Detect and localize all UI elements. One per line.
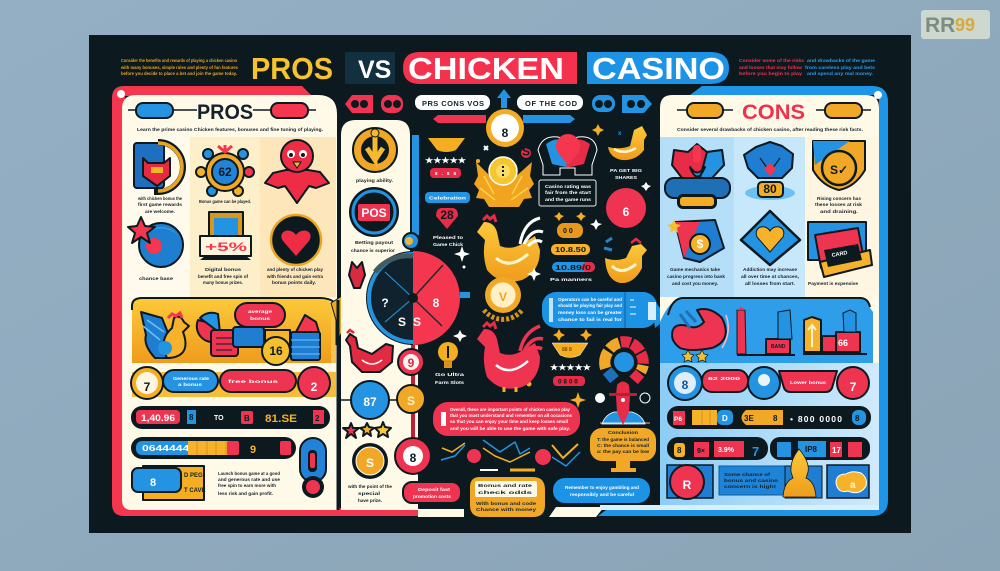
label under POS: Betting payout bbox=[355, 240, 394, 245]
pros text 4: Digital bonus bbox=[205, 267, 242, 272]
icon: gold bowl bbox=[428, 138, 465, 152]
badge: 8 red bbox=[395, 438, 431, 474]
badge: S gold: S bbox=[366, 456, 374, 470]
stat bar 1: TO bbox=[214, 415, 224, 422]
value pill: blue and red: 10.89/0 bbox=[555, 263, 591, 272]
value pill: blue and red bbox=[552, 262, 595, 272]
box: gold nugget: a bbox=[850, 480, 856, 491]
box: text: bonus and casino bbox=[724, 478, 778, 483]
red bottom pill: promotion costs bbox=[413, 494, 451, 499]
icon: pentagon coin bbox=[667, 219, 724, 262]
blue label pill bbox=[425, 192, 470, 203]
label under value pills: Pa manners bbox=[550, 277, 593, 282]
icon: crown flower bbox=[665, 144, 730, 209]
badge: 7 red bbox=[837, 367, 869, 399]
red center callout: Overall, these are important points of chicken casino play bbox=[450, 407, 570, 412]
cons stat bar 3: IP8 bbox=[805, 445, 818, 454]
red bottom pill: Deposit fast bbox=[418, 487, 451, 492]
pros text 5: bonus points daily. bbox=[272, 280, 316, 285]
icon: red swirl bird bbox=[672, 309, 728, 362]
yellow and white info box: Chance with money bbox=[476, 507, 537, 512]
stat bar 1: B bbox=[244, 414, 250, 423]
blue vertical bar bbox=[403, 135, 419, 249]
poster board bbox=[89, 35, 911, 533]
white label chip: left bbox=[415, 95, 490, 110]
spinning wheel: ? bbox=[381, 296, 389, 310]
title word: VS bbox=[345, 52, 395, 84]
red pill left bbox=[702, 370, 748, 392]
card graphic: T CAVE bbox=[184, 488, 206, 494]
badge: 6 bbox=[606, 188, 646, 228]
cons text 2: casino progress into bank bbox=[667, 274, 725, 279]
icon: red figure bbox=[349, 262, 365, 288]
icon: yellow duck: x bbox=[618, 131, 622, 137]
icon: red rooster bbox=[477, 323, 543, 392]
label under bulb: Farm Slots bbox=[435, 380, 465, 385]
blue callout: Operators can be careful and bbox=[558, 297, 622, 302]
icon: credit cards: CARD bbox=[831, 250, 848, 259]
icon: bulb bbox=[438, 342, 458, 368]
up arrow bbox=[497, 89, 511, 108]
icon: yellow person bbox=[783, 449, 816, 497]
cons stat bar 2: 7 bbox=[752, 444, 759, 459]
stat bar 2 bbox=[131, 437, 296, 459]
ball: 8 bbox=[486, 109, 524, 147]
blue pill: a bonus bbox=[178, 382, 203, 387]
title word: VS: VS bbox=[358, 56, 391, 84]
stat bar 1: 2 bbox=[315, 414, 320, 423]
badge: 8 blue: 8 bbox=[682, 378, 689, 392]
yellow info card: Conclusion bbox=[608, 430, 638, 435]
red heart: 28 bbox=[436, 208, 458, 229]
watermark logo: 99 bbox=[955, 15, 975, 35]
cons text 3: all losses from start. bbox=[745, 281, 795, 286]
pros text 4 bbox=[198, 267, 248, 285]
red score pill bbox=[430, 168, 461, 178]
box: R badge bbox=[667, 465, 713, 499]
red chip bbox=[381, 95, 403, 113]
pros header bbox=[128, 101, 316, 124]
cons text 3: all over time at chances, bbox=[741, 274, 799, 279]
cons text 2: and cost you money. bbox=[672, 281, 718, 286]
blue callout: chance to fail is real for bbox=[558, 317, 622, 322]
icon: blue flower: 80 bbox=[763, 182, 777, 196]
red pill right bbox=[779, 371, 837, 392]
spinning wheel bbox=[366, 251, 460, 345]
outlined text box: and the game runs bbox=[545, 197, 591, 202]
connector line bbox=[341, 340, 413, 440]
pros text 5: and plenty of chicken play bbox=[267, 267, 323, 272]
intro text: cons: and drawbacks of the game bbox=[807, 58, 876, 63]
intro text: pros: with many bonuses, simple rules and plenty of fun features bbox=[120, 65, 239, 70]
pros text 6: Launch bonus game at a good bbox=[218, 471, 280, 476]
ball: 8: 8 bbox=[502, 126, 509, 140]
blue chip bbox=[592, 95, 615, 112]
watermark logo bbox=[921, 10, 990, 39]
red note pill: bonus bbox=[250, 316, 271, 321]
left arrow chip bbox=[345, 95, 373, 113]
badge: 16 bbox=[262, 337, 290, 365]
stat bar 2: 06444444 bbox=[142, 444, 197, 453]
red pill right: Lower bonus bbox=[790, 380, 827, 385]
cons stat bar 3: 17 bbox=[832, 446, 841, 455]
intro text: pros: Consider the benefits and rewards of playing a chicken casino bbox=[121, 58, 237, 63]
cons stat bar 2: 8 bbox=[677, 446, 682, 455]
cons text 3: Addiction may increase bbox=[743, 267, 797, 272]
row of cons badges bbox=[668, 366, 869, 400]
red bottom pill bbox=[403, 482, 461, 503]
label under bulb: Go Ultra bbox=[435, 372, 465, 377]
yellow and white info box: With bonus and code bbox=[476, 501, 537, 506]
outlined text box: fair from the start bbox=[545, 190, 592, 195]
cons header bbox=[677, 101, 871, 124]
pros text 6: and generous rate and use bbox=[218, 477, 280, 482]
yellow info card: T: the game is balanced bbox=[597, 437, 649, 442]
title word: CHICKEN: CHICKEN bbox=[408, 51, 564, 86]
spinning wheel: S bbox=[398, 315, 406, 329]
stars bbox=[343, 422, 391, 438]
badge: V: V bbox=[499, 290, 507, 304]
cons stat bar 1 bbox=[667, 406, 871, 429]
icon: certificate bbox=[200, 212, 251, 260]
yellow info card: C: the chance is small bbox=[597, 443, 649, 448]
icon: certificate: +5% bbox=[205, 240, 248, 254]
icon: yellow hen bbox=[604, 238, 647, 283]
icon: gear: 62 bbox=[218, 165, 232, 179]
badge: 2: 2 bbox=[311, 380, 318, 394]
badge: 7 red: 7 bbox=[850, 380, 857, 394]
icon: shield cat bbox=[134, 142, 183, 192]
blue tag bbox=[460, 292, 470, 298]
pros text 5: with friends and gain extra bbox=[266, 274, 323, 279]
blue pill: Generous rate bbox=[173, 376, 210, 381]
yellow oval chip bbox=[557, 223, 583, 238]
blue arrow bar bbox=[523, 115, 575, 123]
intro text: cons: before you begin to play bbox=[739, 71, 803, 76]
blue callout: money loss can be greater bbox=[558, 310, 622, 315]
yellow info card: a: the pay can be low bbox=[597, 449, 649, 454]
intro text: cons: from careless play and bets bbox=[805, 65, 876, 70]
stat bar 1: 8 bbox=[189, 413, 194, 422]
label under POS bbox=[351, 240, 395, 253]
cons text 2: Game mechanics take bbox=[670, 267, 720, 272]
red score pill: 8.88 bbox=[435, 171, 456, 176]
icon: diamond heart bbox=[741, 211, 800, 265]
blue bottom pill: responsibly and be careful bbox=[570, 492, 634, 497]
icon: bowl small bbox=[552, 343, 588, 358]
blue feature band bbox=[660, 298, 873, 363]
pros text 5 bbox=[266, 267, 323, 285]
intro text: pros: before you decide to place a bet and join the game today. bbox=[121, 71, 237, 76]
yellow feature band bbox=[132, 294, 366, 365]
top navigation chips bbox=[345, 89, 652, 123]
badge: 9 bbox=[398, 349, 424, 375]
badge: POS: POS bbox=[361, 206, 387, 220]
pros header: PROS bbox=[197, 101, 253, 124]
right arrow chip bbox=[622, 95, 652, 113]
card graphic: 8 bbox=[150, 477, 156, 489]
yellow and white info box: Bonus and rate bbox=[478, 483, 533, 488]
pros text 3: chance base bbox=[139, 276, 174, 281]
red note pill bbox=[235, 303, 285, 327]
pros text 4: benefit and free spin of bbox=[198, 274, 248, 279]
red center callout: and you will be able to use the game with safe play. bbox=[450, 426, 570, 431]
yellow oval chip: 0 0 bbox=[563, 228, 573, 235]
donut chart bbox=[605, 342, 643, 380]
badge: 9: 9 bbox=[408, 356, 415, 370]
yellow info card bbox=[590, 428, 656, 472]
pros text 1: with chicken bonus the bbox=[137, 196, 182, 201]
bar graphic: yellow: 66 bbox=[838, 338, 848, 348]
five stars row: ★★★★★ bbox=[425, 156, 467, 165]
label under duck bbox=[610, 168, 643, 180]
cons text 2 bbox=[667, 267, 725, 286]
small red S: S bbox=[522, 144, 530, 158]
icon: star ring bbox=[128, 217, 183, 267]
intro text: pros bbox=[120, 58, 239, 76]
icon: bowl small: 88 8 bbox=[562, 347, 572, 353]
badge: S orange bbox=[397, 385, 425, 413]
cons text 3 bbox=[741, 267, 799, 286]
cons stat bar 1: 8 bbox=[855, 414, 860, 423]
red pill bbox=[220, 370, 296, 392]
cons stat bar 2: 9× bbox=[697, 448, 705, 455]
box: text: concern is high! bbox=[724, 484, 777, 489]
intro text: cons bbox=[739, 58, 876, 76]
icon: yellow rooster bbox=[477, 216, 543, 286]
icon: blue stack bbox=[291, 315, 320, 360]
red pill left: 62 2000 bbox=[708, 376, 741, 381]
cons stat bar 2 bbox=[667, 437, 768, 460]
box: R badge: R bbox=[683, 478, 692, 492]
icon: heart circle bbox=[271, 215, 321, 265]
cons header: CONS bbox=[742, 101, 805, 124]
pros text 6: less risk and gain profit. bbox=[218, 491, 273, 496]
label under S badge bbox=[347, 484, 392, 503]
value pill: yellow: 10.8.50 bbox=[555, 245, 586, 254]
box: text: Some chance of bbox=[724, 472, 771, 477]
label under duck: SHARES bbox=[615, 175, 637, 180]
label under S badge: have prize. bbox=[358, 498, 382, 503]
icon: red bird bbox=[265, 140, 329, 203]
star row small: ★★★★★ bbox=[550, 363, 592, 372]
yellow and white info box bbox=[470, 477, 545, 517]
pros text 1 bbox=[137, 196, 182, 214]
cons subtitle: Consider several drawbacks of chicken casino, after reading these risk facts. bbox=[677, 127, 863, 132]
white label chip: left: PRS CONS VOS bbox=[422, 99, 484, 108]
cons stat bar 1: 8 bbox=[773, 414, 778, 423]
badge: 16: 16 bbox=[269, 344, 283, 358]
outlined text box bbox=[539, 180, 596, 206]
stat bar 1: 81.SE bbox=[265, 413, 297, 425]
icon: yellow duck bbox=[608, 126, 647, 160]
stat bar 2: 9 bbox=[250, 444, 256, 456]
red note pill: average bbox=[248, 309, 273, 314]
red score chip: 0 8 0 0 bbox=[558, 378, 578, 386]
icon: gear bbox=[196, 145, 254, 196]
label under POS: chance is superior bbox=[351, 248, 395, 253]
badge: V bbox=[484, 277, 522, 319]
red heart: 28: 28 bbox=[440, 208, 454, 222]
cons stat bar 1: D bbox=[722, 414, 728, 423]
pros text 6: free spin to earn more with bbox=[218, 483, 276, 488]
watermark logo: RR bbox=[925, 14, 955, 37]
red center callout: that you must understand and remember on all occasions bbox=[450, 413, 572, 418]
intro text: cons: Consider some of the risks bbox=[739, 58, 805, 63]
red center callout bbox=[433, 402, 580, 436]
blue bottom pill: Remember to enjoy gambling and bbox=[565, 485, 639, 490]
label under duck: PA GET BIG bbox=[610, 168, 643, 173]
box: person right bbox=[785, 466, 822, 498]
pros text 1: first game rewards bbox=[138, 202, 182, 207]
icon: joystick bbox=[595, 382, 650, 425]
pros text 1: are welcome. bbox=[145, 209, 175, 214]
value pill: yellow bbox=[551, 244, 590, 255]
icon: pentagon coin: $ bbox=[697, 237, 704, 251]
cons text 1 bbox=[815, 196, 862, 214]
intro text: cons: and losses that may follow bbox=[739, 65, 803, 70]
badge: 2 bbox=[298, 367, 330, 399]
icon: gold shield bbox=[813, 141, 865, 190]
panel: pros bbox=[112, 86, 426, 516]
title banner bbox=[251, 51, 729, 86]
bar graphic: red bbox=[737, 307, 795, 356]
stat bar 1: 1,40.96 bbox=[141, 413, 175, 423]
center cream column bbox=[338, 120, 464, 517]
label: left of rooster bbox=[433, 235, 463, 247]
badge: 8 red: 8 bbox=[410, 451, 417, 465]
badge: 7: 7 bbox=[144, 380, 151, 394]
red score chip bbox=[553, 376, 585, 386]
badge: S orange: S bbox=[407, 394, 415, 408]
panel: cons bbox=[549, 86, 888, 517]
icon: gold shield: S✓ bbox=[830, 163, 848, 177]
line charts bbox=[441, 440, 580, 470]
stat bar 1 bbox=[131, 406, 330, 429]
title word: PROS: PROS bbox=[251, 51, 333, 86]
blue bottom pill bbox=[553, 478, 650, 503]
cons text 4: Payment is expensive bbox=[808, 281, 858, 286]
cons stat bar 1: 3E bbox=[744, 414, 754, 423]
pros text 4: many bonus prizes. bbox=[203, 280, 243, 285]
cons stat bar 3 bbox=[770, 437, 870, 460]
yellow and white info box: check odds bbox=[478, 490, 533, 495]
blue label pill: Celebration bbox=[429, 196, 466, 200]
card graphic bbox=[132, 466, 206, 500]
icon: toggle bbox=[300, 438, 326, 498]
title word: CASINO: CASINO bbox=[592, 51, 725, 86]
icon: heart badge bbox=[538, 134, 597, 175]
pros text 2: Bonus game can be played. bbox=[199, 199, 251, 204]
label under S badge: with the point of the bbox=[347, 484, 392, 489]
icon: golden bird bbox=[474, 157, 534, 207]
badge: 7 bbox=[131, 367, 163, 399]
intro text: cons: and spend any real money. bbox=[807, 71, 873, 76]
spinning wheel: 8 bbox=[433, 296, 440, 310]
box: text bbox=[719, 466, 785, 495]
red pill: free bonus bbox=[228, 379, 279, 384]
badge: blue ring bbox=[748, 367, 780, 399]
gold specks bbox=[476, 124, 604, 408]
icon: pie and cans bbox=[197, 313, 290, 356]
badge: 87: 87 bbox=[363, 395, 377, 409]
label: left of rooster: Pleased to bbox=[433, 235, 463, 240]
icon: blue chicken bbox=[141, 312, 189, 358]
icon: gold anchor badge bbox=[353, 128, 397, 172]
label: left of rooster: Game Chick bbox=[433, 242, 463, 247]
bar graphic: yellow bbox=[803, 310, 867, 355]
cons stat bar 2: 3.9% bbox=[718, 447, 735, 454]
icon: red chicken bbox=[346, 330, 393, 372]
outlined text box: Casino rating was bbox=[545, 184, 592, 189]
sparkles bbox=[453, 146, 651, 342]
blue callout bbox=[542, 292, 667, 328]
label under anchor: playing ability. bbox=[356, 178, 393, 183]
white label chip: right bbox=[517, 95, 583, 110]
label under bulb bbox=[435, 372, 465, 385]
badge: 6: 6 bbox=[623, 205, 630, 219]
label under S badge: special bbox=[358, 491, 380, 496]
card graphic: D PEG bbox=[184, 473, 203, 479]
cons stat bar 1: P6 bbox=[674, 416, 682, 423]
white label chip: right: OF THE COD bbox=[525, 99, 578, 108]
cons text 1: these losses at risk bbox=[815, 202, 862, 207]
bar graphic: red: BAND bbox=[771, 344, 786, 350]
red center callout: so that you can enjoy your time and keep losses small bbox=[450, 419, 568, 424]
blue pill bbox=[163, 370, 218, 392]
pros subtitle: Learn the prime casino Chicken features, bonuses and fine tuning of playing. bbox=[137, 127, 323, 132]
red arrow bar bbox=[433, 115, 486, 123]
badge: 8 blue bbox=[668, 366, 702, 400]
badge: 87 bbox=[351, 381, 389, 419]
icon: blue flower bbox=[744, 142, 795, 200]
cons stat bar 1: • 800 0000 bbox=[790, 414, 842, 424]
spinning wheel: S bbox=[413, 315, 421, 329]
pros text 6 bbox=[218, 471, 280, 496]
badge: S gold bbox=[352, 443, 388, 479]
box: gold nugget bbox=[827, 465, 869, 498]
icon: credit cards bbox=[808, 222, 872, 277]
badge: POS bbox=[349, 187, 399, 237]
cons text 1: Rising concern has bbox=[817, 196, 861, 201]
blue callout: should be playing fair play and bbox=[558, 303, 622, 308]
cons text 1: and draining. bbox=[820, 209, 858, 214]
row of pros badges bbox=[131, 367, 336, 399]
